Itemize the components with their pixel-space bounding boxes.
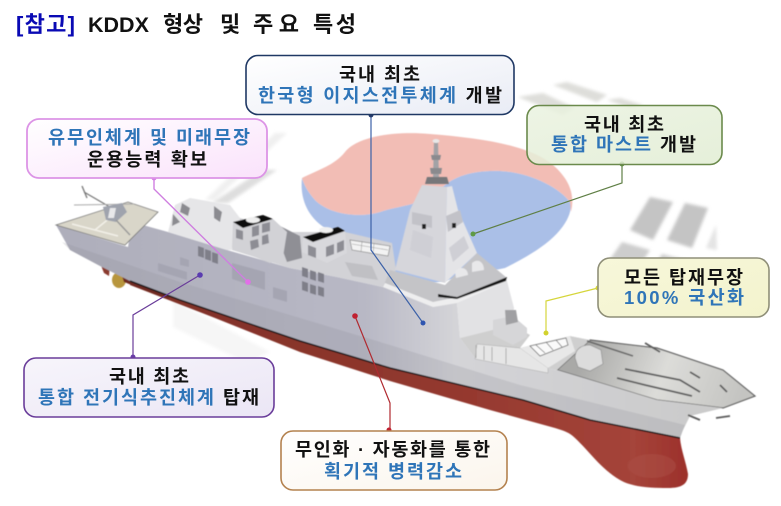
background: flag trigram bars bbox=[173, 82, 717, 363]
callout: integrated mast bbox=[527, 106, 722, 164]
flight deck and helicopter bbox=[56, 186, 158, 245]
callout: 100% domestic weapons: 모든 탑재무장 bbox=[624, 267, 743, 288]
ship bbox=[56, 139, 755, 488]
title bbox=[16, 12, 356, 37]
connector: unmanned systems bbox=[152, 176, 251, 285]
title: KDDX bbox=[88, 13, 150, 37]
connector: electric propulsion bbox=[130, 272, 203, 360]
hull windows and panels bbox=[158, 246, 324, 302]
bridge deck bbox=[383, 253, 514, 338]
callout: integrated electric propulsion: 통합 전기식추진체계 탑재 bbox=[38, 387, 259, 408]
bow deck bbox=[557, 340, 755, 408]
callout: crew reduction through automation bbox=[281, 431, 507, 490]
title: 특성 bbox=[313, 12, 356, 37]
callout: 100% domestic weapons: 100% 국산화 bbox=[624, 287, 744, 308]
grey hull side bbox=[56, 222, 723, 438]
forward deck structures bbox=[460, 310, 590, 373]
callout: integrated mast: 국내 최초 bbox=[584, 114, 664, 135]
callout: Korean Aegis combat system bbox=[246, 56, 514, 114]
radar block 2 bbox=[302, 227, 347, 263]
connector: crew reduction bbox=[352, 313, 392, 432]
callout: crew reduction through automation: 무인화 · 자동화를 통한 bbox=[295, 439, 490, 460]
title: 주요 bbox=[253, 12, 299, 37]
callout: crew reduction through automation: 획기적 병력감소 bbox=[324, 461, 462, 482]
callout: Korean Aegis combat system: 한국형 이지스전투체계 개발 bbox=[258, 85, 502, 106]
title: [참고] bbox=[16, 12, 75, 37]
integrated mast pyramid bbox=[395, 139, 477, 283]
rudder and propeller bbox=[100, 263, 170, 299]
callout: unmanned systems and future weapons bbox=[27, 119, 267, 178]
title: 형상 bbox=[163, 12, 203, 37]
connector: mast bbox=[470, 162, 624, 236]
callout: Korean Aegis combat system: 국내 최초 bbox=[339, 64, 420, 85]
radar block 1 bbox=[232, 215, 287, 263]
mid superstructure bbox=[168, 198, 240, 250]
bulb highlight bbox=[628, 454, 676, 478]
callout: unmanned systems and future weapons: 유무인체계 및 미래무장 bbox=[48, 127, 250, 148]
callout: integrated electric propulsion bbox=[24, 358, 274, 417]
callout: integrated mast: 통합 마스트 개발 bbox=[551, 134, 696, 155]
bow deck fittings bbox=[617, 343, 730, 420]
callout: integrated electric propulsion: 국내 최초 bbox=[109, 366, 189, 387]
connector: Aegis system bbox=[368, 112, 426, 326]
callout: unmanned systems and future weapons: 운용능력 확보 bbox=[87, 149, 207, 170]
background: Korean flag taegeuk bbox=[302, 133, 572, 290]
main gun bbox=[575, 341, 633, 371]
callout: 100% domestic weapons bbox=[598, 258, 769, 317]
red lower hull and bulb bbox=[130, 281, 688, 488]
connector: armament bbox=[544, 286, 600, 336]
title: 및 bbox=[220, 12, 240, 37]
